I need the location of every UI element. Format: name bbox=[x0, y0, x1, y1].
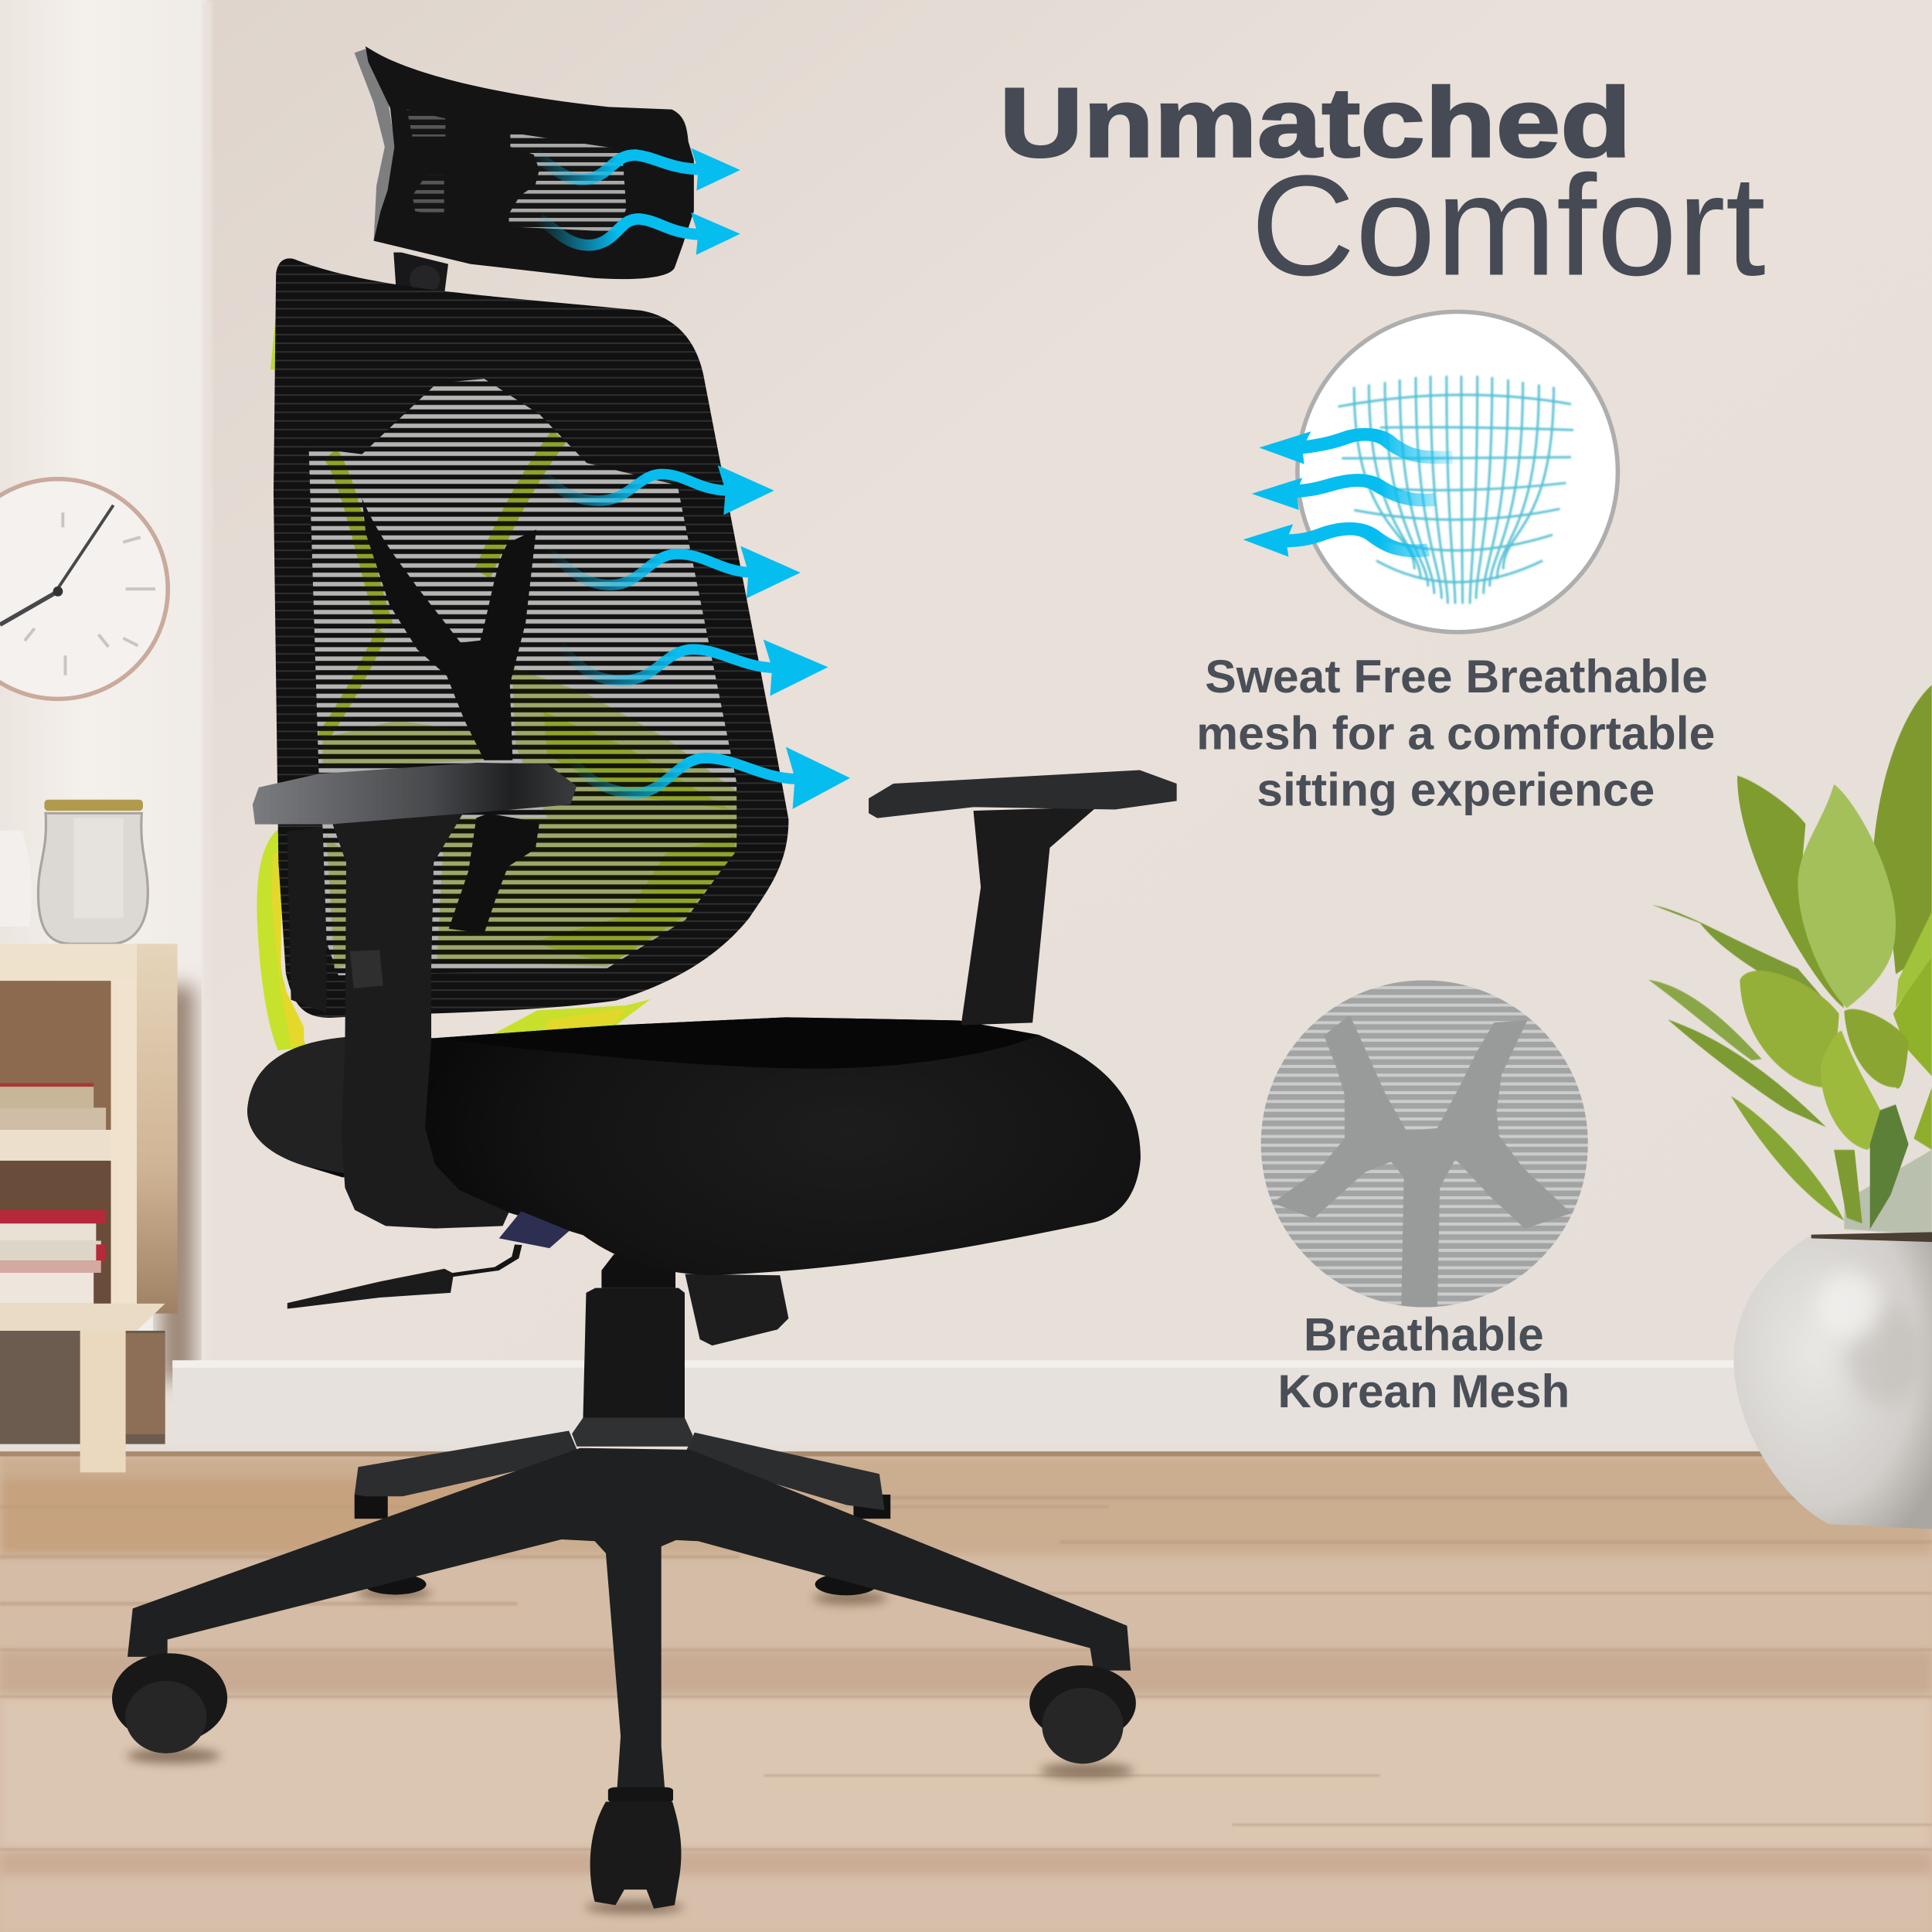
white circle bbox=[1298, 311, 1617, 632]
wall clock bbox=[0, 477, 170, 701]
airflow arrows on headrest bbox=[536, 148, 740, 255]
books bbox=[0, 1083, 106, 1304]
upper arrow bbox=[536, 148, 740, 191]
front legs bbox=[128, 1448, 1131, 1791]
right armrest bbox=[869, 770, 1177, 1026]
shelf shadow on wall bbox=[160, 986, 195, 1380]
mesh grid icon bbox=[1338, 376, 1573, 604]
seat cushion bbox=[247, 1017, 1141, 1275]
white speckled pot bbox=[1733, 1232, 1932, 1529]
arrow bottom bbox=[1243, 524, 1428, 557]
baseboard bbox=[172, 1360, 1762, 1454]
star base bbox=[112, 1430, 1136, 1909]
title line 1: Unmatched bbox=[999, 68, 1631, 178]
caption: korean mesh: Korean Mesh bbox=[1277, 1365, 1570, 1417]
glass jar bbox=[38, 800, 148, 944]
wood floor bbox=[0, 1451, 1932, 1932]
potted plant bbox=[1648, 685, 1932, 1529]
wooden shelf bbox=[0, 944, 178, 1472]
cyan arrows bbox=[1243, 431, 1452, 557]
green frame bbox=[257, 296, 651, 1050]
caption: sweat free bbox=[1196, 650, 1715, 816]
arrow top bbox=[1259, 431, 1452, 464]
arrow 3 bbox=[560, 640, 828, 696]
arrow 1 bbox=[539, 465, 774, 515]
tilt knob bbox=[685, 1274, 788, 1345]
caption: sweat free: sitting experience bbox=[1257, 764, 1655, 816]
backrest bbox=[274, 258, 788, 1018]
lever bbox=[287, 1245, 519, 1309]
chair bbox=[112, 46, 1177, 1913]
mesh panel bbox=[287, 379, 736, 1013]
front casters bbox=[112, 1653, 1136, 1909]
title line 2: Comfort bbox=[1250, 147, 1766, 306]
arrow 2 bbox=[547, 546, 801, 598]
airflow arrows on backrest bbox=[539, 465, 850, 809]
headrest mount bbox=[393, 253, 448, 296]
badge: korean mesh bbox=[1261, 980, 1588, 1308]
leaves bbox=[1648, 685, 1932, 1235]
gray Y shape bbox=[1273, 1015, 1571, 1308]
green frame seen through mesh bbox=[322, 437, 736, 967]
lower arrow bbox=[539, 213, 740, 255]
caption: sweat free: Sweat Free Breathable bbox=[1205, 650, 1708, 702]
mesh patches bbox=[406, 110, 626, 232]
title bbox=[999, 68, 1766, 306]
left armrest bbox=[253, 763, 577, 1229]
headrest bbox=[355, 46, 694, 279]
caption: sweat free: mesh for a comfortable bbox=[1196, 706, 1715, 759]
plank streaks bbox=[0, 1496, 1932, 1851]
arrow middle bbox=[1252, 478, 1435, 510]
caster shadows bbox=[127, 1587, 1134, 1913]
caption: korean mesh: Breathable bbox=[1304, 1308, 1544, 1360]
arrow 4 bbox=[567, 747, 850, 809]
dark Y support bbox=[362, 498, 536, 760]
gas lift column bbox=[572, 1254, 692, 1447]
caption: korean mesh bbox=[1277, 1308, 1570, 1417]
white vase bbox=[0, 831, 32, 927]
rear legs bbox=[355, 1430, 580, 1496]
under-seat label bbox=[499, 1211, 570, 1248]
rear casters bbox=[355, 1495, 890, 1595]
badge: airflow mesh bbox=[1243, 311, 1617, 632]
